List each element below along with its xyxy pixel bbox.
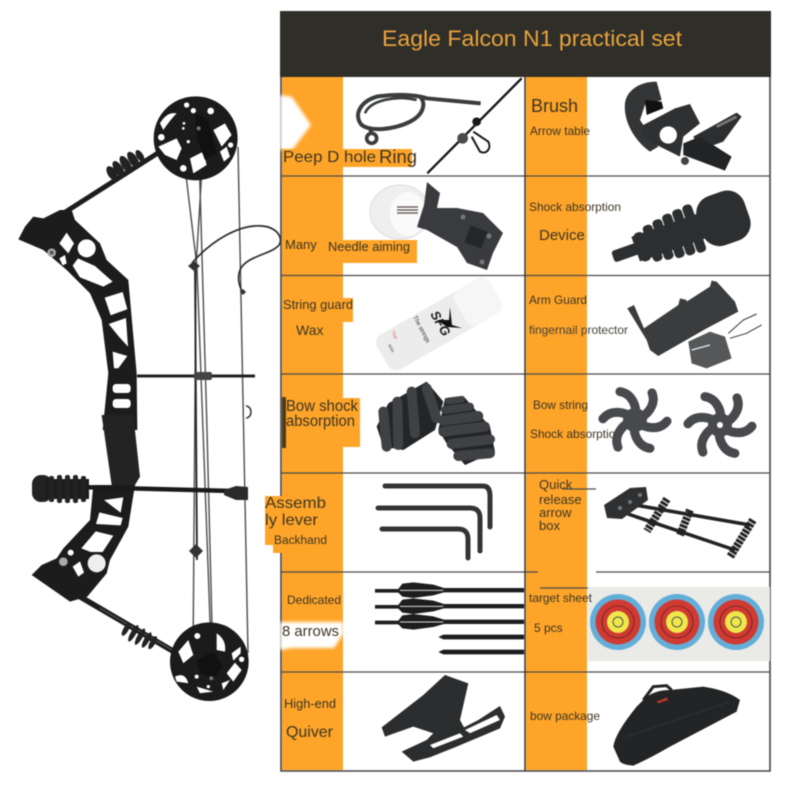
title banner <box>280 11 771 77</box>
label: Bow string: Bow string <box>533 398 588 412</box>
label: 5 pcs: 5 pcs <box>534 621 563 635</box>
icon: quiver <box>382 675 505 762</box>
right damper <box>688 397 752 453</box>
label: Shock absorption: Shock absorption <box>529 200 621 214</box>
panel: arm guard fingernail protector <box>529 281 762 368</box>
label highlight <box>328 240 417 263</box>
icon: arrow rest <box>625 82 742 171</box>
panel: bow package <box>530 686 740 766</box>
label: High-end: High-end <box>284 697 336 711</box>
panel: dedicated 8 arrows <box>280 582 524 654</box>
label highlight <box>265 496 343 553</box>
label: Brush: Brush <box>531 96 578 116</box>
dark edge mark <box>282 397 286 448</box>
orange left column <box>282 77 343 770</box>
panel: quick release arrow box <box>539 477 753 557</box>
panel: many needle aiming <box>285 182 503 270</box>
D-loop cord <box>192 226 280 293</box>
icon: peep tube <box>358 95 481 143</box>
icon: bow case <box>613 686 740 766</box>
damper bases <box>377 382 443 450</box>
label: Needle aiming: Needle aiming <box>328 240 410 254</box>
icon: bow sight <box>370 182 503 270</box>
label: absorption: absorption <box>286 413 355 430</box>
icon: arrows <box>375 582 524 654</box>
label: Quiver: Quiver <box>286 724 334 741</box>
icon: rubber dampers <box>377 382 495 465</box>
icon: wax tube: The <box>389 330 399 341</box>
left damper <box>603 392 667 448</box>
label: Ring: Ring <box>379 147 417 167</box>
label: String guard: String guard <box>283 298 353 312</box>
table grid lines <box>281 12 770 771</box>
label: Wax: Wax <box>296 322 323 338</box>
compound bow <box>18 96 280 701</box>
upper cam <box>154 96 238 180</box>
lower cam <box>170 622 249 701</box>
icon: peep on string <box>427 78 522 173</box>
label: Bow shock: Bow shock <box>286 398 358 415</box>
stabilizer damper <box>32 475 89 503</box>
icon: arm guard <box>627 281 738 356</box>
target 3 <box>708 594 764 650</box>
panel: high-end quiver <box>284 675 505 762</box>
peep and nock <box>188 261 246 558</box>
title text: Eagle Falcon N1 practical set <box>382 26 683 51</box>
label: target sheet: target sheet <box>529 591 593 605</box>
table background <box>281 12 770 771</box>
lower limb dampers <box>120 622 159 650</box>
icon: wax tube: SFG <box>427 308 454 339</box>
icon: wax tube <box>373 274 505 374</box>
lower limb <box>80 597 197 665</box>
label: Many: Many <box>285 237 317 252</box>
bow strings and cables <box>182 142 248 668</box>
damper ribs <box>383 388 490 456</box>
panel: brush arrow table <box>530 82 742 171</box>
target backdrop <box>588 587 770 661</box>
label: release: release <box>539 492 582 507</box>
icon: wax tube: The strings <box>411 315 430 344</box>
label: box: box <box>539 518 560 533</box>
label: Arm Guard: Arm Guard <box>529 293 587 307</box>
label: 8 arrows: 8 arrows <box>282 624 339 640</box>
label: arrow: arrow <box>539 505 572 520</box>
panel: target sheet 5 pcs <box>529 587 770 661</box>
label: Device: Device <box>539 227 585 244</box>
white chevron mark <box>280 95 311 150</box>
limb dampers <box>104 149 146 182</box>
panel: assembly lever backhand <box>265 486 490 558</box>
label: Arrow table: Arrow table <box>530 124 590 138</box>
label: Shock absorption: Shock absorption <box>530 427 622 441</box>
label: ly lever: ly lever <box>265 512 319 529</box>
label: Backhand: Backhand <box>274 535 327 547</box>
label highlight <box>343 398 360 447</box>
label: bow package: bow package <box>530 709 600 723</box>
icon: spiral dampers <box>603 392 752 453</box>
panel: bow shock absorption <box>282 382 495 465</box>
label: Quick: Quick <box>539 477 573 492</box>
label: Assemb: Assemb <box>265 495 326 512</box>
label: Peep D hole: Peep D hole <box>283 149 376 166</box>
grip <box>102 415 140 485</box>
label highlight <box>282 149 412 167</box>
icon: stabilizer damper <box>604 186 756 282</box>
white torn mark <box>280 622 343 650</box>
arrow rest rod <box>137 372 255 418</box>
riser <box>18 210 137 430</box>
stabilizer <box>32 475 248 503</box>
label: fingernail protector: fingernail protector <box>529 323 628 337</box>
icon: hex keys <box>378 486 490 558</box>
icon: finger tab <box>688 314 762 368</box>
label highlight <box>343 298 353 322</box>
panel: shock absorption device <box>529 186 756 282</box>
panel: peep D hole ring <box>280 78 522 173</box>
panel: bow string shock absorption <box>530 392 752 453</box>
target 2 <box>649 594 705 650</box>
label: Dedicated: Dedicated <box>287 593 341 607</box>
panel: string guard wax <box>283 274 505 374</box>
orange right column <box>526 77 587 770</box>
upper limb <box>63 128 197 213</box>
icon: arrow quiver <box>604 487 753 557</box>
lower riser <box>32 485 135 602</box>
target 1 <box>590 594 646 650</box>
icon: wax tube: wax <box>386 343 396 354</box>
